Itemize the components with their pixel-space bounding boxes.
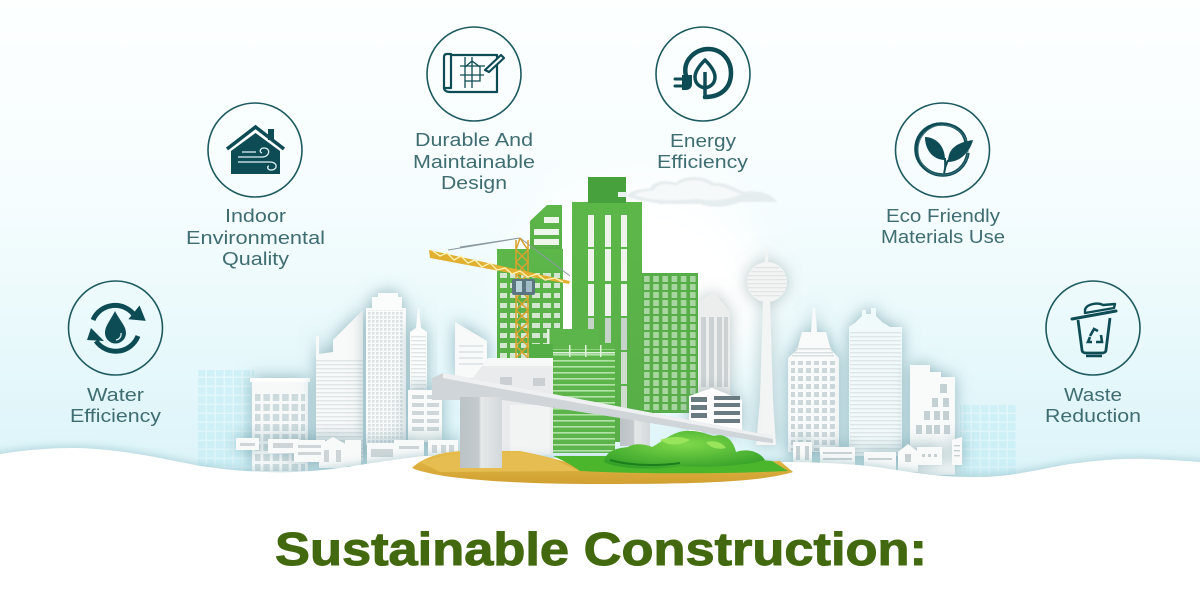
icon: plug and leaf <box>656 27 750 121</box>
label: Water <box>87 384 144 405</box>
label: Design <box>441 172 507 193</box>
building: slanted block <box>455 322 487 378</box>
building: front green block <box>530 329 615 453</box>
white city left <box>236 293 487 472</box>
faint city left <box>198 370 254 472</box>
building: tall green tower <box>572 177 642 442</box>
viaduct <box>432 373 773 468</box>
label: Maintainable <box>413 151 535 172</box>
item: waste reduction <box>1045 281 1141 426</box>
small houses <box>236 437 458 468</box>
icon: leaves in circle <box>896 103 990 197</box>
icon: house with air <box>208 103 302 197</box>
label: Durable And <box>415 129 533 150</box>
label: Efficiency <box>70 405 162 426</box>
title: Sustainable Construction: <box>275 523 927 575</box>
building: low grid block <box>250 378 310 472</box>
crane mast <box>516 238 528 360</box>
grey building behind green <box>698 292 730 400</box>
right pier <box>620 416 650 446</box>
sand base <box>412 451 793 484</box>
item: water efficiency <box>68 281 162 426</box>
label: Materials Use <box>881 226 1005 247</box>
TV tower <box>747 245 787 445</box>
crane cab <box>512 279 535 295</box>
label: Waste <box>1064 384 1122 405</box>
island base <box>412 451 793 484</box>
sand mound <box>420 452 580 472</box>
building: tall tower <box>366 293 406 445</box>
label: Indoor <box>225 205 286 226</box>
item: energy efficiency <box>656 27 750 172</box>
label: Efficiency <box>657 151 749 172</box>
white city right <box>788 308 962 475</box>
green lawn <box>553 456 788 473</box>
label: Eco Friendly <box>886 205 1001 226</box>
building: stepped block <box>910 365 955 475</box>
item: durable and maintainable design <box>413 27 535 193</box>
bushes <box>604 431 765 469</box>
deck <box>432 373 773 443</box>
grey building under viaduct <box>473 358 553 455</box>
crane cables <box>448 238 570 276</box>
green building group <box>497 177 742 453</box>
building: spire tower <box>410 308 427 392</box>
building: side block <box>408 390 442 442</box>
cloud <box>627 177 777 207</box>
left pier <box>460 397 502 468</box>
white wave foreground <box>0 448 1200 600</box>
crane jib <box>429 250 570 284</box>
icon: recycling bin <box>1046 281 1140 375</box>
building: slanted green tower <box>530 205 562 260</box>
building: right green grid <box>642 273 698 413</box>
item: eco friendly materials use <box>881 103 1005 247</box>
label: Environmental <box>186 227 325 248</box>
building: stepped slab <box>316 310 363 462</box>
item: indoor environmental quality <box>186 103 325 269</box>
icon: blueprint <box>427 27 521 121</box>
label: Reduction <box>1045 405 1141 426</box>
white glow behind centre <box>510 180 770 400</box>
icon: water cycle <box>68 281 162 375</box>
building: domed tower <box>788 308 839 452</box>
building: left green block <box>497 249 563 364</box>
building: pale glass tower <box>849 308 902 456</box>
small houses <box>793 437 962 472</box>
label: Energy <box>670 130 737 151</box>
faint city right <box>960 405 1016 477</box>
label: Quality <box>222 248 290 269</box>
building: white office block <box>689 388 742 432</box>
tower crane <box>429 238 570 360</box>
